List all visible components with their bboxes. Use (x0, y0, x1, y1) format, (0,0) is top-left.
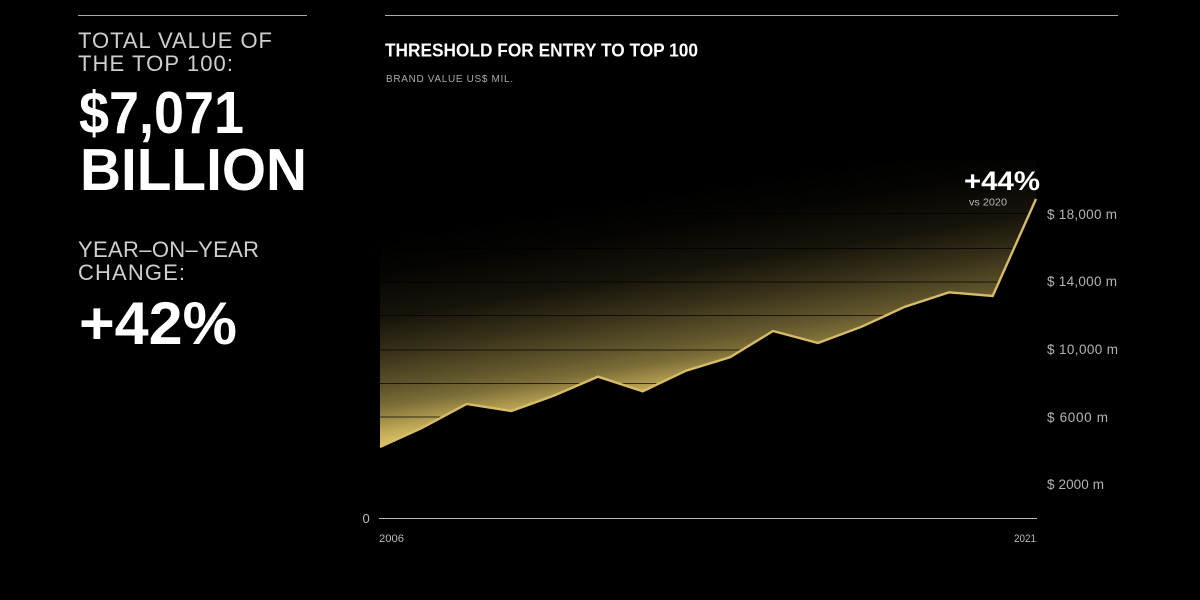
heading: total value label: TOTAL VALUE OF (78, 28, 272, 53)
x axis: 2021 (1014, 533, 1036, 545)
big number: total value (79, 80, 307, 203)
area chart (380, 160, 1036, 450)
x axis: 0 (362, 511, 370, 526)
y axis labels: $ 14,000 m (1047, 274, 1117, 289)
y axis labels: $ 18,000 m (1047, 207, 1117, 222)
panel: total value (78, 15, 307, 203)
big number: total value: $7,071 (79, 80, 244, 146)
callout: +44% vs 2020 (964, 166, 1040, 208)
infographic canvas (78, 15, 1118, 542)
panel: year-on-year change (78, 237, 259, 357)
heading: change label: CHANGE: (78, 260, 185, 285)
heading: total value label: THE TOP 100: (78, 51, 233, 76)
big number: change: +42% (79, 290, 237, 357)
data line (380, 199, 1036, 447)
big number: total value: BILLION (80, 137, 307, 203)
y axis labels: $ 10,000 m (1047, 342, 1118, 357)
panel: threshold chart (362, 15, 1118, 545)
x axis: 2006 (379, 533, 404, 545)
y axis labels (1047, 207, 1118, 492)
callout: +44% vs 2020: vs 2020 (969, 196, 1007, 208)
y axis labels: $ 6000 m (1047, 410, 1108, 425)
y axis labels: $ 2000 m (1047, 477, 1104, 492)
heading: total value label (78, 28, 272, 76)
heading: change label: YEAR–ON–YEAR (78, 237, 259, 262)
callout: +44% vs 2020: +44% (964, 166, 1040, 196)
chart title: THRESHOLD FOR ENTRY TO TOP 100 (385, 40, 698, 60)
heading: change label (78, 237, 259, 285)
x axis (362, 511, 1037, 545)
chart subtitle: BRAND VALUE US$ MIL. (386, 74, 513, 85)
